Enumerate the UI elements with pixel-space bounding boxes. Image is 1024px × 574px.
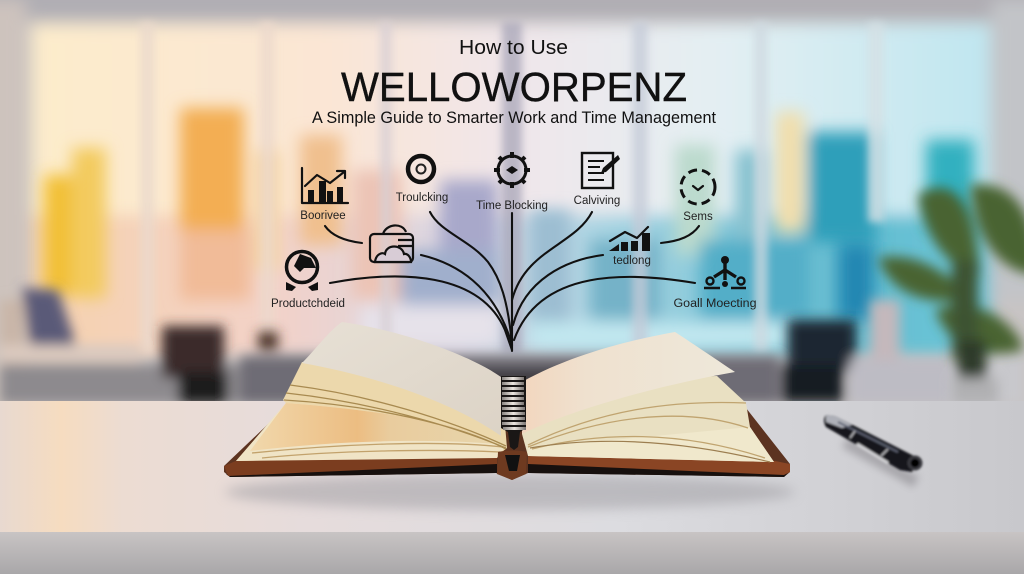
label: Productchdeid [271,298,345,310]
label: Troulcking [396,192,448,204]
left lower pages [236,403,505,461]
right top leaf [522,332,735,434]
icon: people network [704,256,746,288]
blurred plant [878,184,1024,404]
left upper pages [284,385,506,449]
heading: how to use: How to Use [459,37,568,59]
node: clock with label [271,252,345,310]
icon: clock [286,252,318,291]
main title: WELLOWORPENZ [341,64,687,110]
icon: bar chart [302,168,348,203]
right page block base [522,376,774,462]
label: Time Blocking [476,200,548,212]
cover [224,408,790,480]
label: Calviving [574,195,620,207]
connector lines converging on notebook [325,212,699,351]
window mullions [140,22,884,352]
node: time blocking [476,152,548,212]
right lower pages [528,427,774,462]
node: chart icon with label [300,168,348,222]
node: folder cloud icon [370,225,414,262]
node: dial icon with label [681,170,715,223]
label: Goall Moecting [674,298,756,310]
icon: document and pen [582,153,620,188]
node: people network with label [674,256,756,310]
subtitle: A Simple Guide to Smarter Work and Time Management [312,109,716,127]
table surface [0,401,1024,574]
node: target icon with label [396,156,448,204]
left page block base [236,362,507,461]
icon: target [408,156,434,182]
spine gutter [501,376,526,450]
left top leaf [302,322,501,436]
title block [312,37,716,127]
node: document icon with label [574,153,620,207]
label: tedlong [613,255,651,267]
label: Boorivee [300,210,346,222]
blurred skyline [44,108,974,348]
icon: rising bars [609,227,650,251]
spiral rings [502,377,526,430]
icon: gear [494,152,530,188]
label: Sems [683,211,713,223]
blurred furniture [0,288,1024,404]
icon: dial [681,170,715,204]
node: rising bars with label [609,227,651,267]
pen [824,415,922,482]
open spiral notebook [224,322,790,480]
